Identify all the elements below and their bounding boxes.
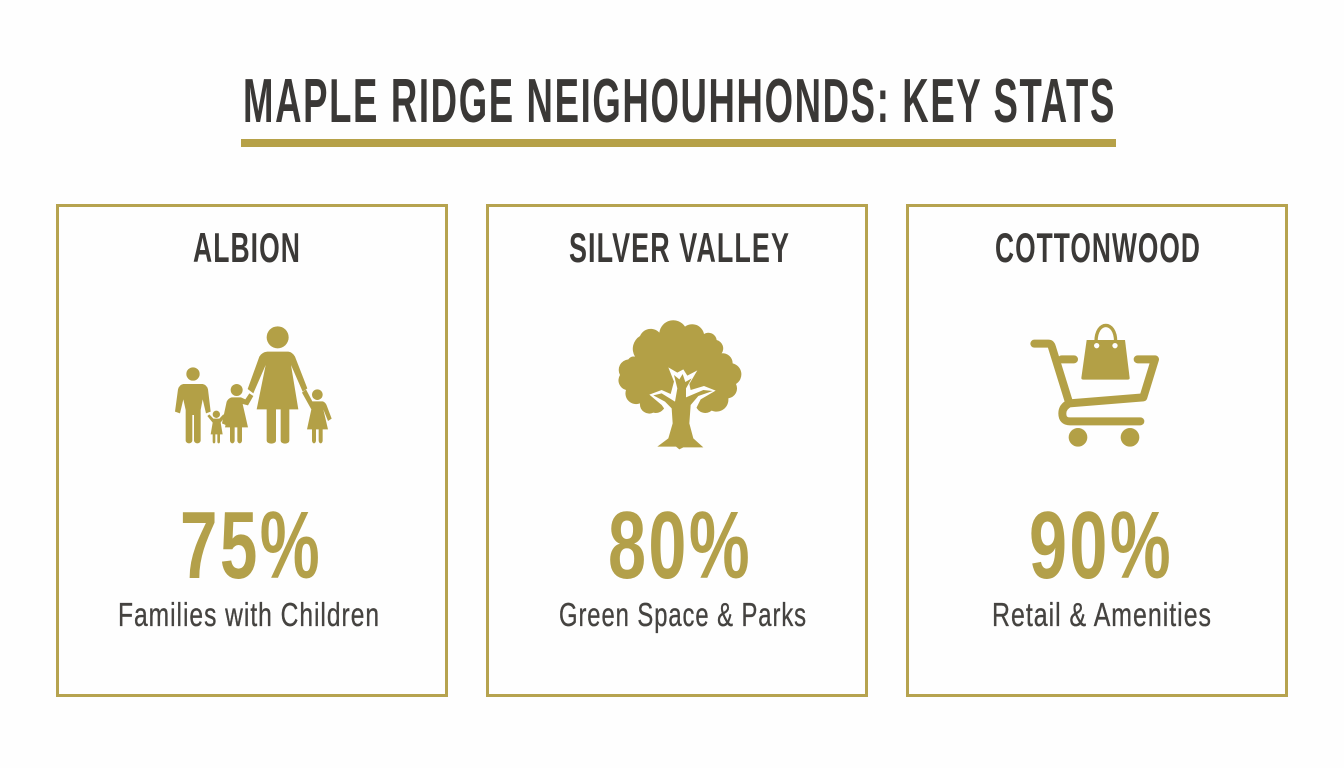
stat: 90%: 90% [1029,492,1173,599]
panel border [58,206,446,696]
panel: Cottonwood [908,206,1286,696]
stat: 80%: 80% [608,492,752,599]
stat: 75%: 75% [180,492,322,599]
icon: shopping cart with bag [1034,325,1155,447]
icon: tree [618,320,741,452]
label: families: Families with Children [118,596,380,633]
heading: Albion: ALBION [193,224,301,271]
label: green space: Green Space & Parks [559,596,807,633]
heading: Silver Valley: SILVER VALLEY [569,224,790,271]
title underline [241,139,1116,147]
icon: family [175,326,332,444]
panel border [488,206,866,696]
panel border [908,206,1286,696]
heading: Cottonwood: COTTONWOOD [995,224,1201,271]
label: retail: Retail & Amenities [992,596,1212,633]
panel: Albion [58,206,446,696]
panel: Silver Valley [488,206,866,696]
